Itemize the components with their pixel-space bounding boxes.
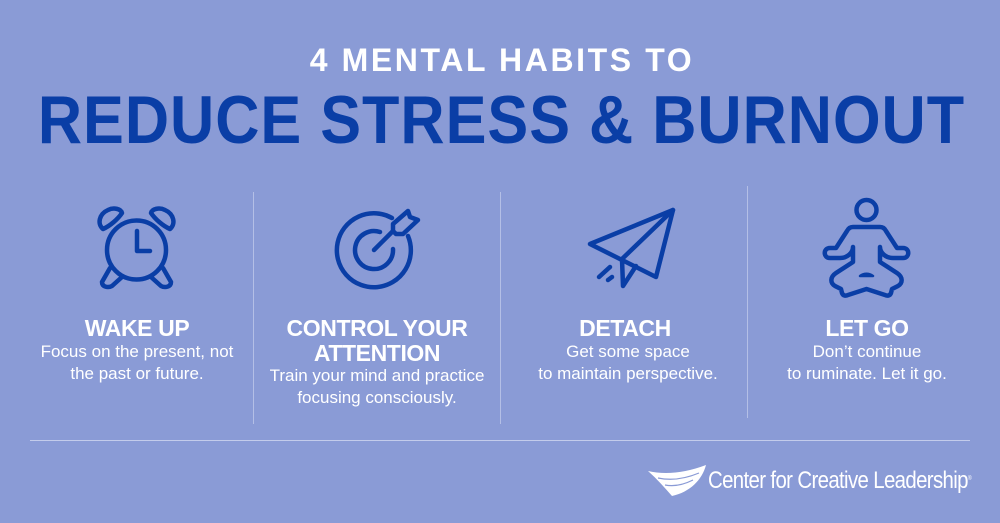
text: control your attention description <box>270 366 484 407</box>
icon: target with arrow <box>334 208 420 290</box>
heading: detach: DETACH <box>579 314 671 340</box>
text: detach description: to maintain perspective. <box>538 364 718 383</box>
icon: paper plane <box>588 208 676 288</box>
text: let go description <box>787 342 947 383</box>
text: wake up description: Focus on the present, not <box>41 342 233 361</box>
text: wake up description: the past or future. <box>70 364 204 383</box>
text: control your attention description: focusing consciously. <box>297 388 457 407</box>
text: control your attention description: Train your mind and practice <box>270 366 484 385</box>
heading: control your attention: CONTROL YOUR <box>287 314 467 340</box>
text: detach description: Get some space <box>566 342 690 361</box>
text: detach description <box>538 342 718 383</box>
title: REDUCE STRESS & BURNOUT <box>38 82 965 158</box>
panel: control your attention <box>270 208 484 407</box>
panel: let go <box>787 198 947 383</box>
heading: control your attention <box>287 314 468 366</box>
text: let go description: to ruminate. Let it go. <box>787 364 947 383</box>
logo: Center for Creative Leadership <box>648 465 972 496</box>
subtitle: 4 MENTAL HABITS TO <box>310 42 694 78</box>
text: logo wordmark: Center for Creative Leadership® <box>708 467 971 494</box>
panel: wake up <box>41 206 234 383</box>
heading: let go: LET GO <box>825 314 909 340</box>
icon: meditating person <box>822 198 910 298</box>
heading: control your attention: ATTENTION <box>314 340 440 366</box>
icon: logo wing <box>648 465 706 496</box>
panel: detach <box>538 208 718 383</box>
icon: alarm clock <box>97 206 176 290</box>
heading: wake up: WAKE UP <box>85 314 189 340</box>
text: wake up description <box>41 342 234 383</box>
text: let go description: Don’t continue <box>813 342 921 361</box>
